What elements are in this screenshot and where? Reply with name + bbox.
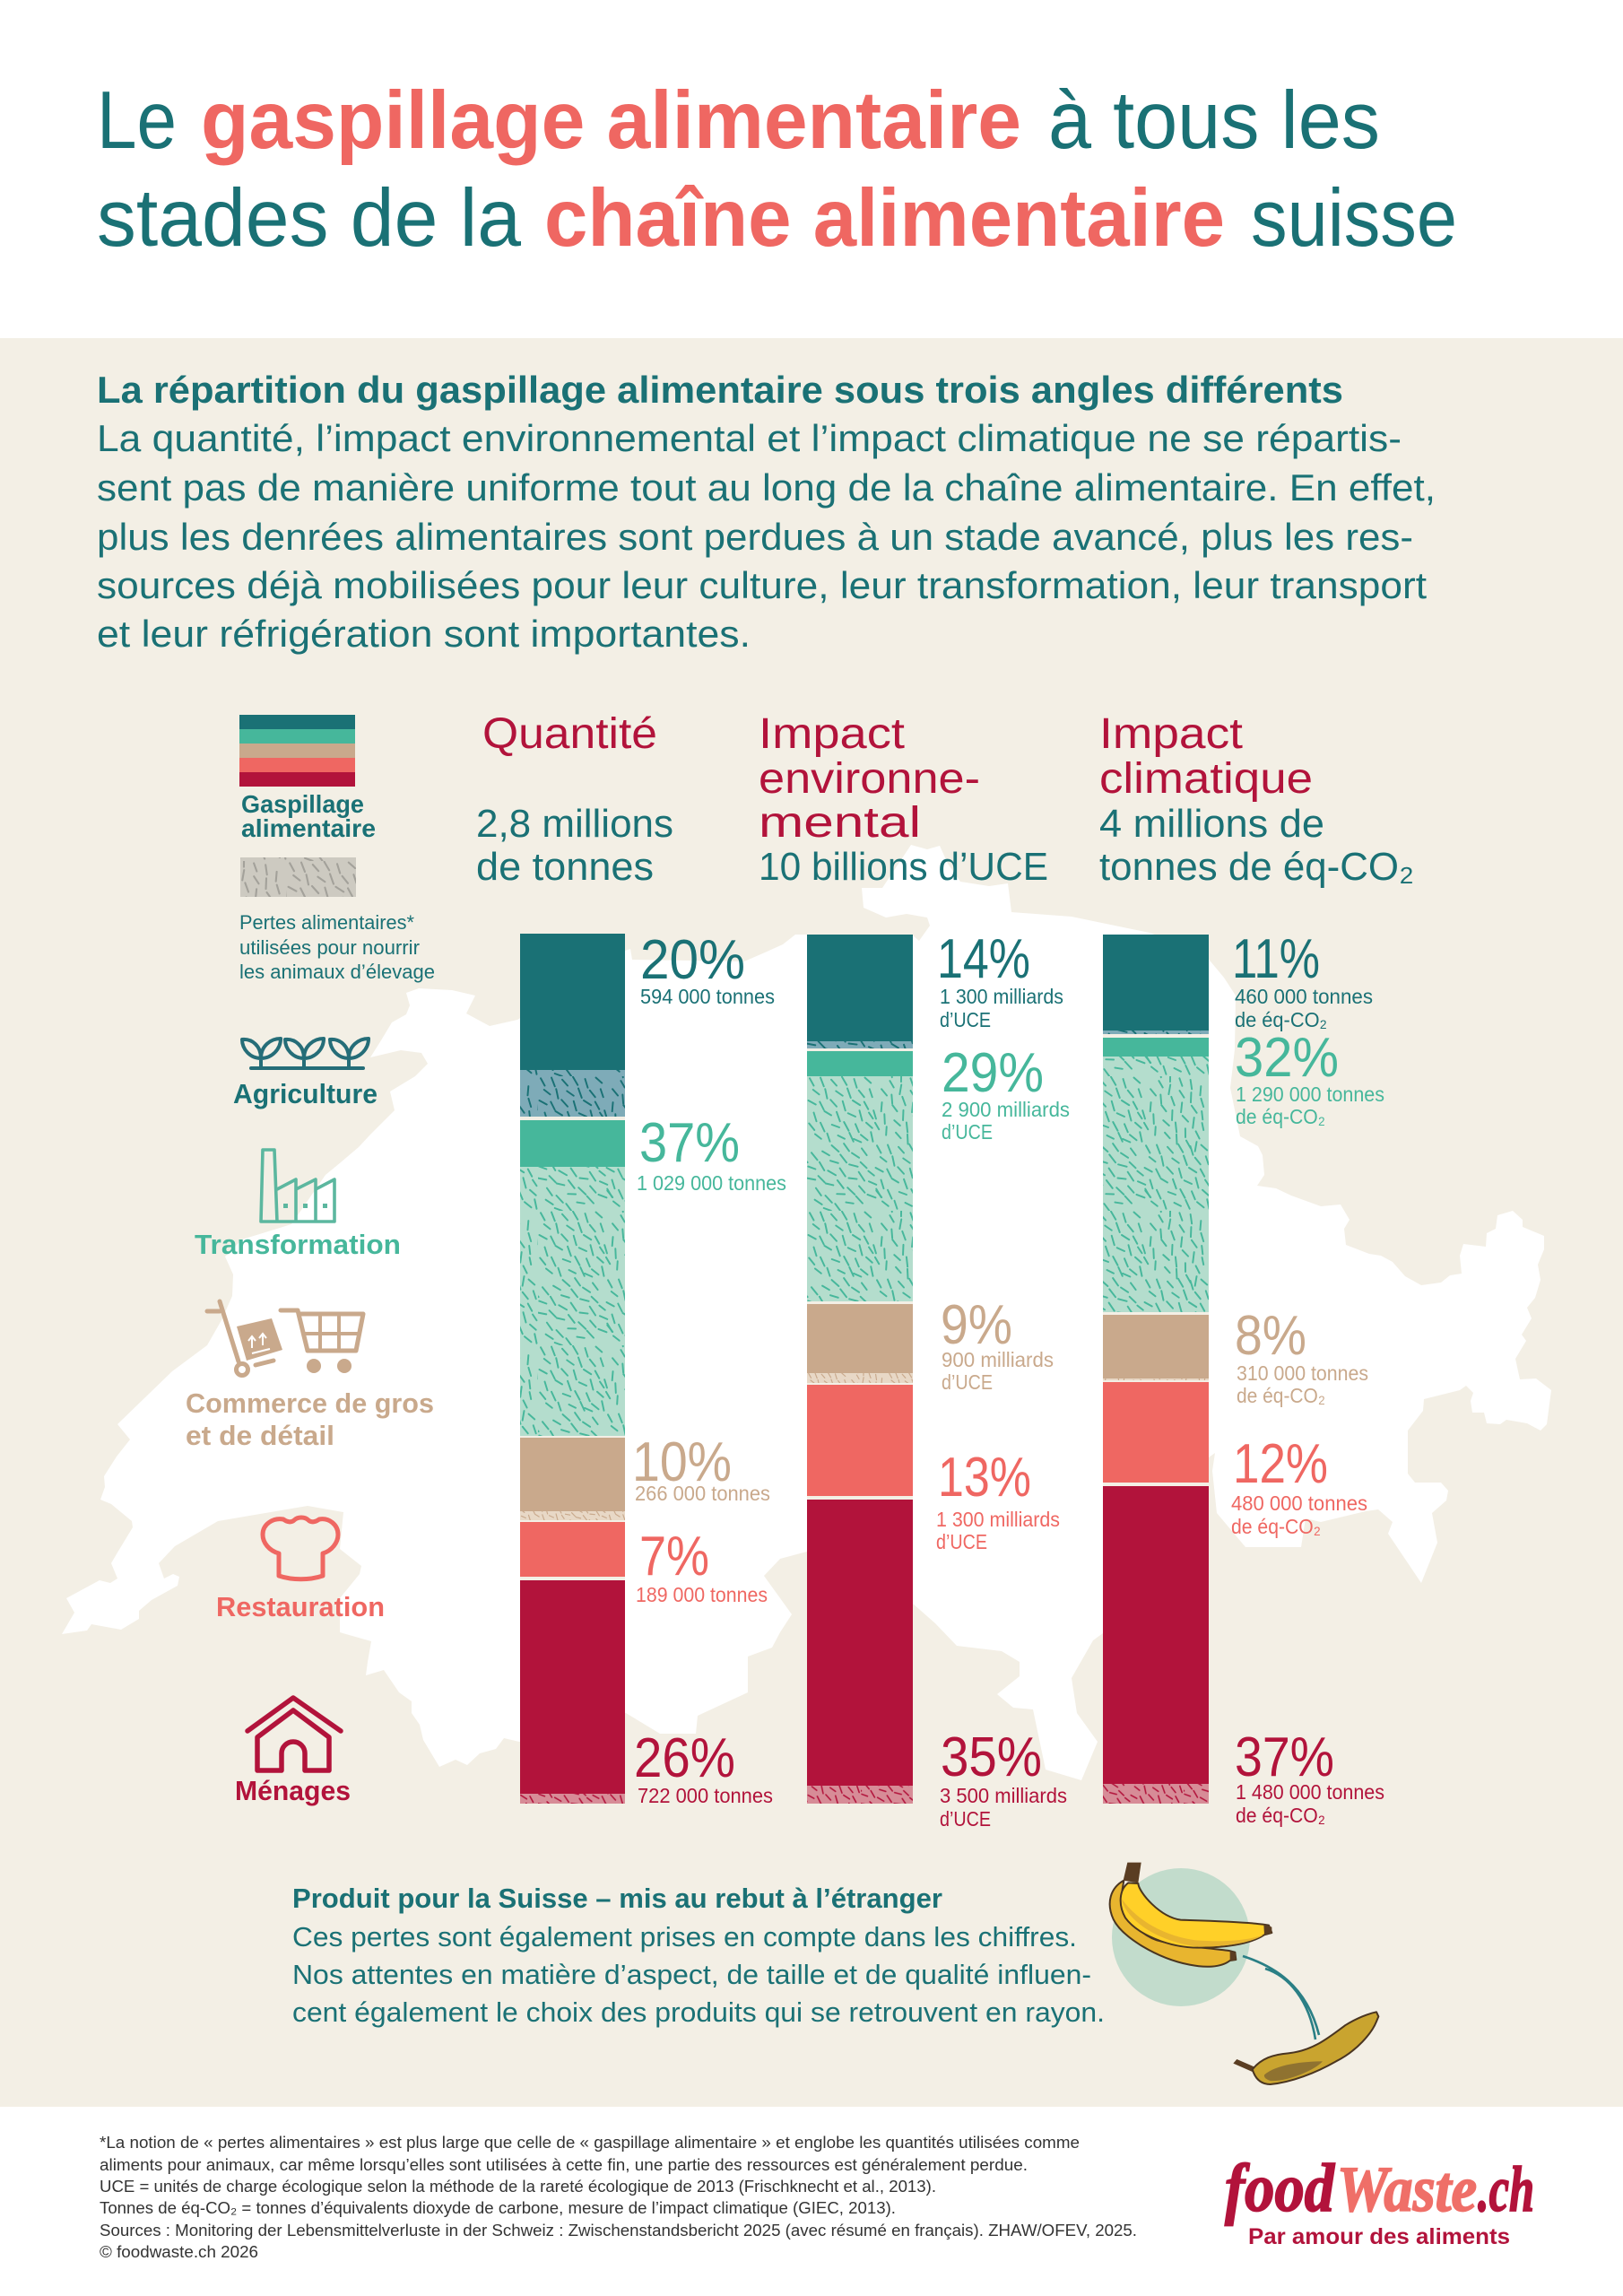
legend label: food losses: Pertes alimentaires* [239, 911, 414, 934]
column header: environmental impact [759, 710, 1048, 889]
intro text block: sent pas de manière uniforme tout au long de la chaîne alimentaire. En effet, [97, 466, 1436, 509]
value: agriculture 20%: 20% [640, 929, 745, 991]
value: agriculture 11%: 11% [1232, 928, 1320, 990]
value: agriculture 11%: de éq-CO₂ [1235, 1008, 1327, 1031]
value: agriculture 11%: 460 000 tonnes [1235, 985, 1373, 1008]
logo: foodWaste.ch: .ch [1478, 2153, 1534, 2225]
value: catering 12%: de éq-CO₂ [1231, 1515, 1321, 1538]
value: processing 32%: de éq-CO₂ [1236, 1105, 1325, 1128]
callout text: Ces pertes sont également prises en compte dans les chiffres. [292, 1921, 1077, 1952]
icon: chef hat [263, 1518, 338, 1579]
value: retail 8% [1235, 1305, 1368, 1407]
legend [239, 715, 435, 983]
map of Switzerland [62, 845, 1551, 1780]
value: processing 29%: 2 900 milliards [942, 1098, 1070, 1121]
icon and label: wholesale and retail [186, 1301, 434, 1451]
legend swatch: food waste stripes [239, 715, 355, 787]
column header: quantity: Quantité [482, 710, 657, 758]
value: processing 37% [637, 1112, 786, 1195]
title: à tous les [1048, 75, 1380, 166]
column header: quantity [476, 710, 673, 889]
column header: quantity: de tonnes [476, 845, 654, 889]
value: catering 13% [936, 1447, 1060, 1553]
footnotes: UCE = unités de charge écologique selon la méthode de la rareté écologique de 2013 (Frischknecht et al., 2013). [100, 2177, 936, 2196]
title: gaspillage alimentaire [201, 75, 1021, 166]
value: catering 13%: 13% [938, 1447, 1031, 1509]
icon: sprouts [242, 1039, 369, 1068]
value: retail 9%: d’UCE [942, 1370, 993, 1394]
intro text block: La quantité, l’impact environnemental et l’impact climatique ne se répartis- [97, 417, 1402, 459]
illustration: bananas [1110, 1863, 1378, 2084]
footnotes: *La notion de « pertes alimentaires » est plus large que celle de « gaspillage alimentaire » et englobe les quantités utilisées comme [100, 2133, 1080, 2152]
legend label: food losses: les animaux d’élevage [239, 961, 435, 983]
value: retail 8%: de éq-CO₂ [1237, 1384, 1325, 1407]
value: retail 8%: 8% [1235, 1305, 1306, 1367]
icon and label: households [235, 1698, 351, 1806]
value: retail 10%: 266 000 tonnes [635, 1482, 770, 1505]
value: processing 37%: 37% [639, 1112, 740, 1174]
legend swatch: food losses hatch [240, 857, 356, 897]
chart: quantity stacked bar [520, 934, 625, 1804]
legend label: food waste: alimentaire [241, 814, 376, 842]
value: retail 8%: 310 000 tonnes [1237, 1361, 1368, 1385]
label: wholesale and retail: et de détail [186, 1420, 334, 1451]
value: catering 13%: 1 300 milliards [936, 1508, 1060, 1531]
value: households 37%: 37% [1235, 1726, 1334, 1788]
icon: trolley and cart [207, 1301, 363, 1376]
value: households 35%: d’UCE [940, 1807, 991, 1831]
label: households: Ménages [235, 1775, 351, 1806]
value: agriculture 20%: 594 000 tonnes [640, 985, 775, 1008]
icon: house [247, 1698, 341, 1770]
value: households 26%: 722 000 tonnes [638, 1784, 773, 1807]
column header: environmental impact: mental [759, 799, 921, 847]
value: processing 29%: 29% [942, 1042, 1044, 1104]
value: catering 7%: 7% [639, 1526, 709, 1587]
value: households 35%: 3 500 milliards [940, 1784, 1067, 1807]
value: households 37% [1235, 1726, 1384, 1827]
title: chaîne alimentaire [544, 173, 1225, 264]
value: processing 32%: 32% [1235, 1027, 1339, 1089]
value: processing 29%: d’UCE [942, 1120, 993, 1144]
value: agriculture 20% [640, 929, 775, 1008]
title: stades de la [97, 173, 521, 264]
value: catering 12%: 480 000 tonnes [1231, 1492, 1367, 1515]
label: agriculture: Agriculture [233, 1078, 378, 1109]
icon: factory [261, 1150, 334, 1222]
logo: foodWaste.ch: Par amour des aliments [1248, 2224, 1510, 2249]
icon: fresh bananas [1110, 1863, 1271, 1967]
value: retail 10% [632, 1431, 770, 1505]
value: households 35%: 35% [941, 1726, 1042, 1788]
value: retail 9% [941, 1294, 1054, 1394]
value: retail 9%: 900 milliards [942, 1348, 1054, 1371]
intro text block [97, 417, 1436, 655]
logo: foodWaste.ch [1225, 2151, 1534, 2249]
column header: climate impact [1099, 710, 1414, 889]
value: agriculture 14%: 14% [937, 928, 1030, 990]
value: agriculture 14%: 1 300 milliards [940, 985, 1063, 1008]
value: processing 29% [942, 1042, 1070, 1144]
title: Le [97, 75, 177, 166]
title [97, 75, 1457, 264]
value: processing 37%: 1 029 000 tonnes [637, 1171, 786, 1195]
value: catering 12%: 12% [1233, 1433, 1328, 1495]
column header: climate impact: climatique [1099, 755, 1313, 803]
label: processing: Transformation [195, 1229, 401, 1260]
callout text: Nos attentes en matière d’aspect, de taille et de qualité influen- [292, 1959, 1091, 1990]
value: agriculture 14% [937, 928, 1063, 1031]
values: environmental impact column [936, 928, 1070, 1831]
arrow: curved motion lines [1243, 1956, 1319, 2039]
footnotes [100, 2133, 1137, 2261]
footnotes: © foodwaste.ch 2026 [100, 2242, 258, 2261]
value: catering 7% [636, 1526, 768, 1606]
title: suisse [1251, 173, 1457, 264]
label: wholesale and retail: Commerce de gros [186, 1387, 434, 1419]
callout text [292, 1921, 1105, 2028]
value: retail 10%: 10% [632, 1431, 732, 1493]
logo: foodWaste.ch: food [1225, 2151, 1335, 2226]
values: climate impact column [1231, 928, 1384, 1827]
footnotes: Sources : Monitoring der Lebensmittelverluste in der Schweiz : Zwischenstandsbericht 2025 (avec résumé en français). ZHAW/OFEV, 2025. [100, 2221, 1137, 2239]
legend label: food waste [241, 790, 376, 842]
intro text block: sources déjà mobilisées pour leur culture, leur transformation, leur transport [97, 564, 1427, 606]
column header: environmental impact: 10 billions d’UCE [759, 845, 1048, 889]
callout: produced for Switzerland [292, 1883, 1105, 2028]
value: agriculture 14%: d’UCE [940, 1008, 991, 1031]
value: processing 32% [1235, 1027, 1384, 1128]
icon and label: catering [216, 1518, 385, 1622]
value: agriculture 11% [1232, 928, 1373, 1031]
legend label: food losses: utilisées pour nourrir [239, 936, 420, 959]
value: catering 12% [1231, 1433, 1367, 1538]
logo: foodWaste.ch: Waste [1337, 2153, 1477, 2225]
value: households 37%: 1 480 000 tonnes [1236, 1780, 1384, 1804]
value: households 26% [634, 1727, 773, 1807]
value: households 26%: 26% [634, 1727, 735, 1789]
panel: beige background [0, 338, 1623, 2107]
column header: climate impact: Impact [1099, 710, 1243, 758]
intro text block: et leur réfrigération sont importantes. [97, 613, 751, 655]
column header: environmental impact: Impact [759, 710, 905, 758]
intro text block: plus les denrées alimentaires sont perdues à un stade avancé, plus les res- [97, 516, 1413, 558]
column header: climate impact: tonnes de éq-CO₂ [1099, 845, 1414, 889]
value: retail 9%: 9% [941, 1294, 1012, 1356]
legend label: food waste: Gaspillage [241, 790, 364, 818]
value: households 37%: de éq-CO₂ [1236, 1804, 1325, 1827]
chart: environmental impact stacked bar [807, 935, 913, 1804]
values: quantity column [632, 929, 786, 1807]
column header: environmental impact: environne- [759, 755, 980, 803]
label: catering: Restauration [216, 1591, 385, 1622]
column header: quantity: 2,8 millions [476, 802, 673, 846]
icon and label: agriculture [233, 1039, 378, 1109]
icon and label: processing [195, 1150, 401, 1260]
value: processing 32%: 1 290 000 tonnes [1236, 1083, 1384, 1106]
footnotes: aliments pour animaux, car même lorsqu’elles sont utilisées à cette fin, une partie des ressources est généralement perdue. [100, 2155, 1028, 2174]
chart: climate impact stacked bar [1103, 935, 1209, 1804]
intro heading: La répartition du gaspillage alimentaire sous trois angles différents [97, 369, 1343, 411]
footnotes: Tonnes de éq-CO₂ = tonnes d’équivalents dioxyde de carbone, mesure de l’impact climatique (GIEC, 2013). [100, 2198, 896, 2217]
callout heading: Produit pour la Suisse – mis au rebut à l’étranger [292, 1883, 942, 1914]
green circle [1112, 1868, 1250, 2006]
callout text: cent également le choix des produits qui se retrouvent en rayon. [292, 1996, 1105, 2028]
label: wholesale and retail [186, 1387, 434, 1451]
value: catering 7%: 189 000 tonnes [636, 1583, 768, 1606]
legend label: food losses [239, 911, 435, 983]
column header: climate impact: 4 millions de [1099, 802, 1324, 846]
icon: rotten banana [1233, 2012, 1378, 2084]
value: catering 13%: d’UCE [936, 1530, 987, 1553]
value: households 35% [940, 1726, 1067, 1831]
